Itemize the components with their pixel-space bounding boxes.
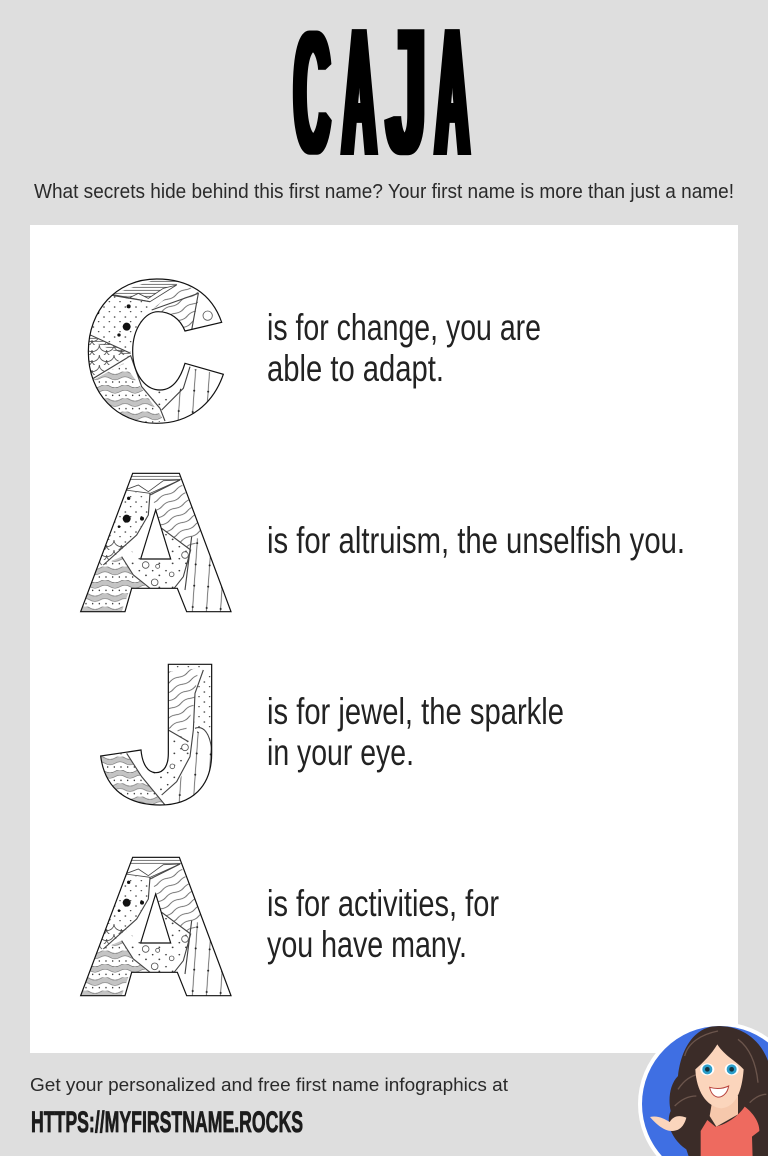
icon: patterned letter J	[98, 664, 215, 810]
text: second A line: is for activities, for	[267, 883, 499, 924]
text: C line: able to adapt.	[267, 348, 444, 389]
face	[695, 1044, 744, 1108]
hair	[669, 1026, 768, 1156]
title	[294, 0, 469, 195]
text: J line: in your eye.	[267, 732, 414, 773]
footer url: HTTPS://MYFIRSTNAME.ROCKS	[31, 1106, 303, 1139]
icon: patterned letter A (second)	[70, 854, 237, 1001]
avatar	[638, 1022, 768, 1156]
footer text: Get your personalized and free first name infographics at	[30, 1074, 508, 1095]
shirt	[701, 1107, 759, 1156]
hand	[650, 1116, 686, 1131]
icon: patterned letter A	[70, 470, 237, 617]
text: C line: is for change, you are	[267, 307, 541, 348]
icon: patterned letter C	[85, 279, 227, 425]
text: second A line: you have many.	[267, 924, 467, 965]
eyes	[700, 1063, 714, 1075]
panel: white card	[30, 225, 738, 1053]
text: J line	[267, 691, 564, 773]
mouth	[710, 1086, 729, 1097]
neck	[710, 1096, 738, 1127]
text: J line: is for jewel, the sparkle	[267, 691, 564, 732]
subtitle: What secrets hide behind this first name? Your first name is more than just a name!	[34, 181, 734, 203]
title: C	[294, 0, 330, 191]
text: C line	[267, 307, 541, 389]
text: second A line	[267, 883, 499, 965]
